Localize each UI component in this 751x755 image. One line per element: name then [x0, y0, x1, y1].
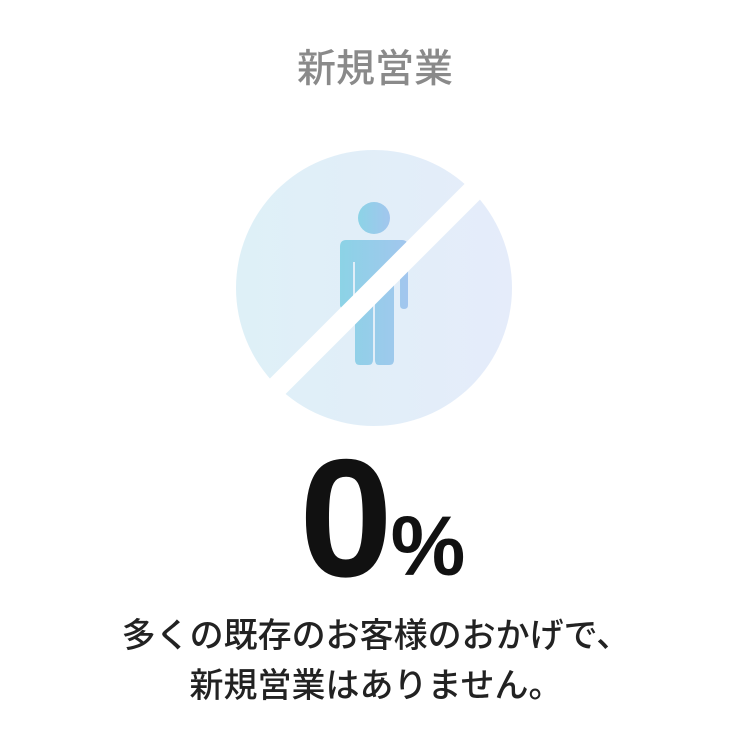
big number 0% — [299, 424, 465, 612]
title: 新規営業 — [297, 48, 453, 91]
icon: person — [340, 202, 408, 365]
big number 0%: % — [391, 499, 465, 593]
big number 0%: 0 — [299, 424, 393, 612]
description text: 新規営業はありません。 — [190, 667, 562, 705]
description text: 多くの既存のお客様のおかげで、 — [122, 617, 630, 655]
icon: no-person sign — [236, 150, 512, 426]
description text — [122, 617, 630, 705]
